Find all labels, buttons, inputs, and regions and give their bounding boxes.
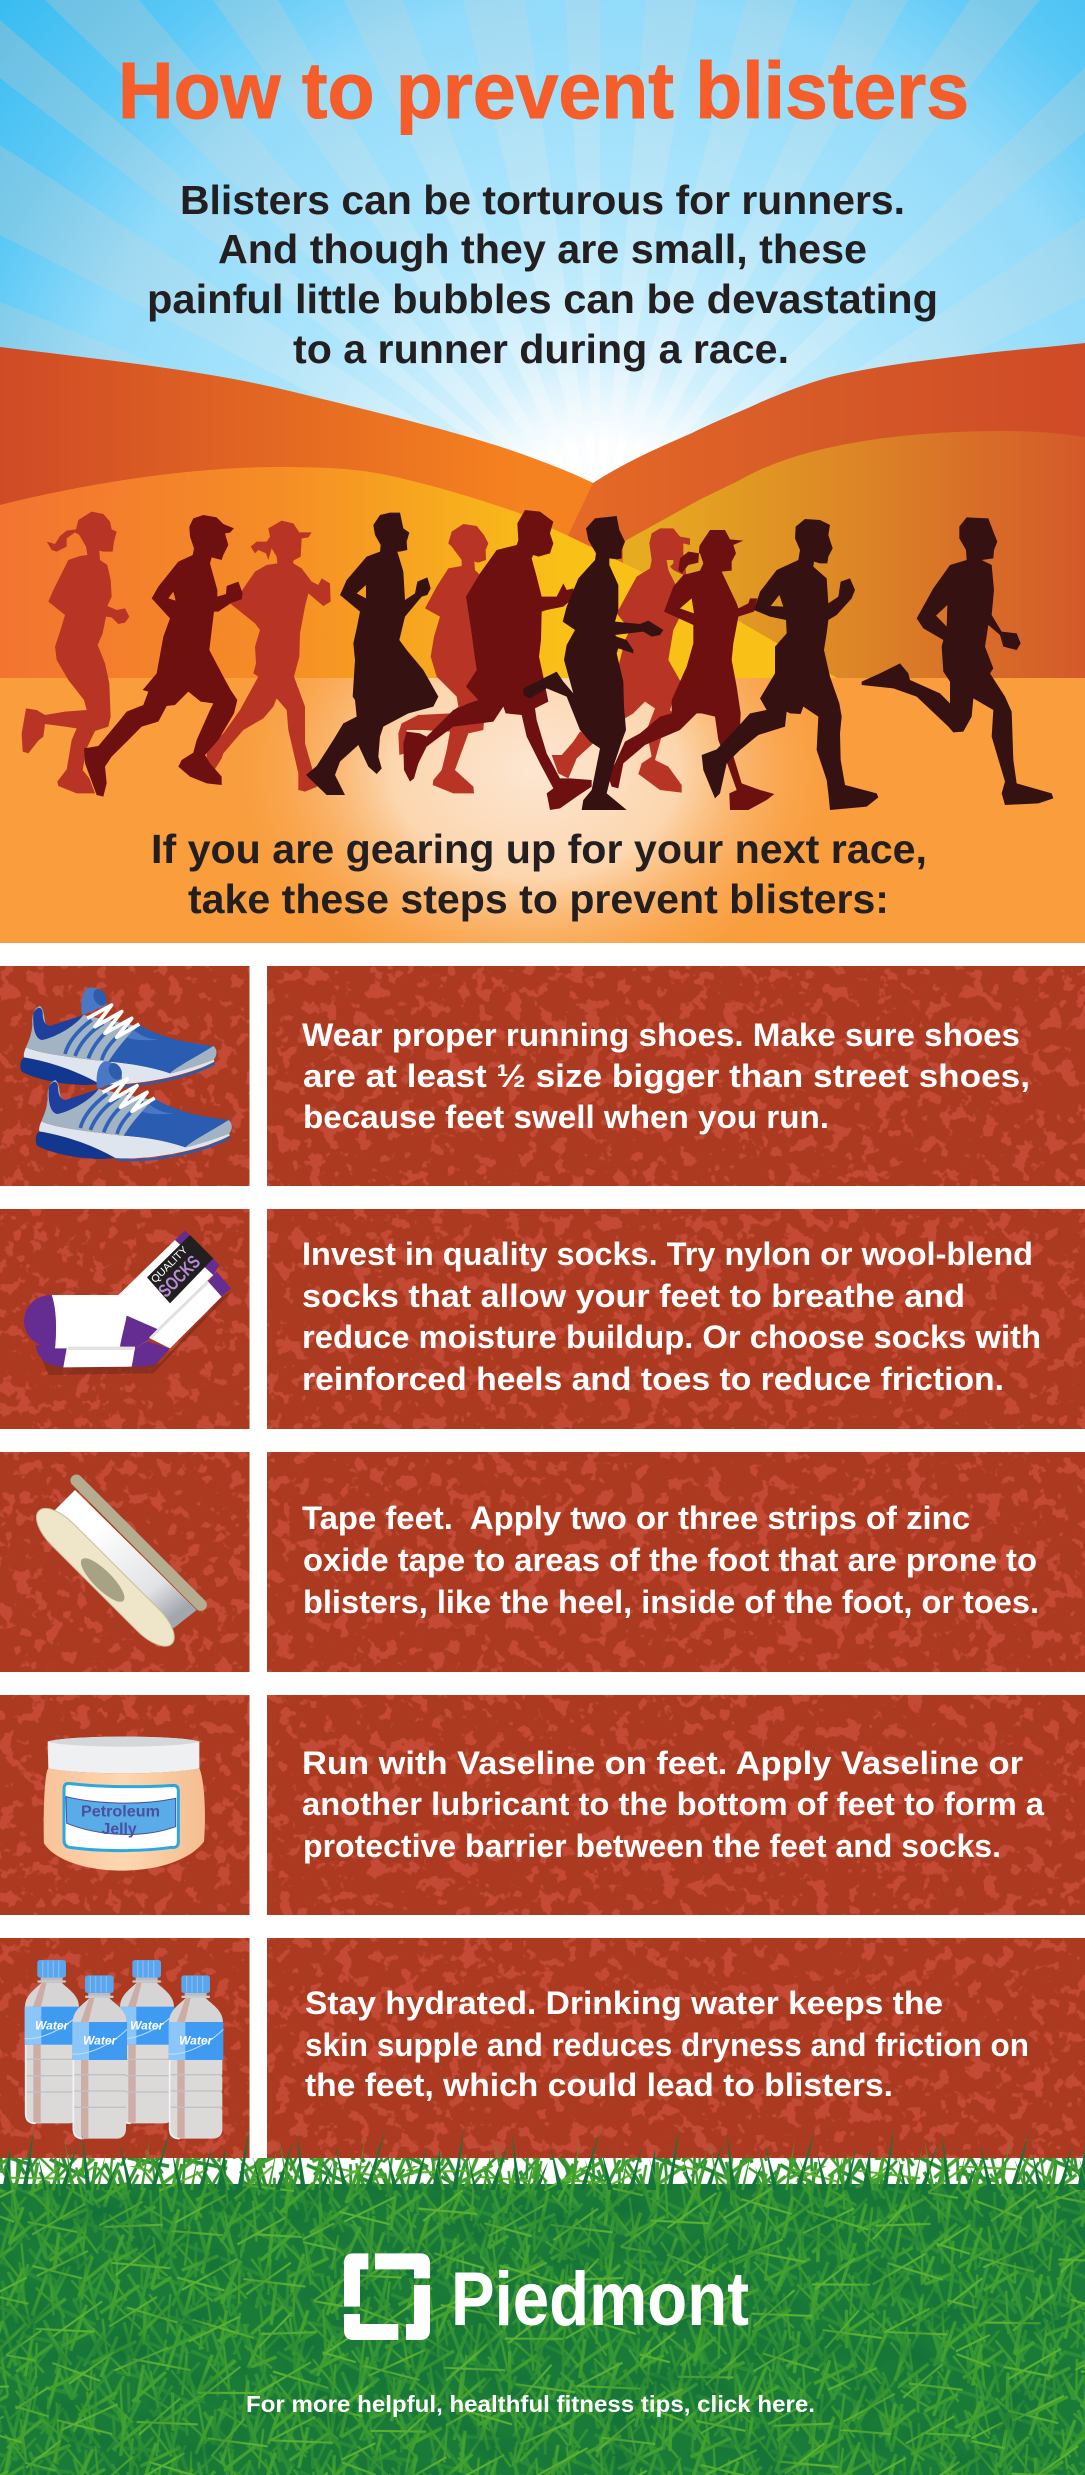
middle row runners	[84, 510, 774, 810]
panel: shoes text: because feet swell when you run.	[303, 1099, 829, 1135]
intro text	[147, 177, 938, 372]
panel: petroleum jelly text: protective barrier between the feet and socks.	[303, 1828, 1001, 1864]
icon: four water bottles	[25, 1960, 223, 2139]
title: How to prevent blisters	[118, 46, 969, 135]
intro text: painful little bubbles can be devastating	[147, 276, 938, 322]
background: sky with sun rays	[0, 0, 1085, 540]
icon: four water bottles: Water	[179, 2034, 214, 2048]
icon: jar of petroleum jelly: Petroleum	[81, 1804, 160, 1821]
logo: Piedmont: Piedmont	[451, 2257, 749, 2342]
icon: jar of petroleum jelly	[44, 1737, 205, 1871]
icon: roll of zinc oxide tape	[28, 1472, 209, 1655]
panel: petroleum jelly text: another lubricant to the bottom of feet to form a	[302, 1786, 1044, 1822]
panel: socks text: socks that allow your feet to breathe and	[302, 1278, 965, 1314]
icon: four water bottles: Water	[83, 2034, 118, 2048]
panel: shoes text: are at least ½ size bigger than street shoes,	[303, 1058, 1030, 1094]
icon: four water bottles: Water	[35, 2018, 70, 2032]
panel: tape text: Tape feet. Apply two or three strips of zinc	[302, 1500, 970, 1536]
sub heading: If you are gearing up for your next race,	[151, 826, 927, 872]
logo: Piedmont	[344, 2253, 749, 2342]
back row runners	[22, 512, 690, 793]
panel: socks text: reinforced heels and toes to reduce friction.	[302, 1361, 1004, 1397]
tile: petroleum jelly	[0, 1695, 250, 1915]
tile: socks	[0, 1209, 250, 1429]
panel: tape text	[267, 1452, 1085, 1672]
panel: shoes text	[267, 966, 1085, 1186]
panel: water text: skin supple and reduces dryness and friction on	[305, 2027, 1029, 2063]
intro text: Blisters can be torturous for runners.	[180, 177, 905, 223]
tile: tape	[0, 1452, 250, 1672]
panel: socks text	[267, 1209, 1085, 1429]
icon: four water bottles: Water	[130, 2018, 165, 2032]
icon: quality socks: QUALITY	[150, 1245, 190, 1286]
panel: water text	[267, 1938, 1085, 2158]
icon: quality socks	[24, 1231, 232, 1375]
footer call to action: For more helpful, healthful fitness tips, click here.	[246, 2391, 815, 2417]
icon: running shoes	[20, 987, 232, 1160]
panel: socks text: reduce moisture buildup. Or choose socks with	[302, 1319, 1041, 1355]
panel: water text: Stay hydrated. Drinking water keeps the	[305, 1985, 943, 2021]
runners silhouettes	[22, 510, 1053, 810]
panel: socks text: Invest in quality socks. Try nylon or wool-blend	[302, 1236, 1033, 1272]
panel: petroleum jelly text: Run with Vaseline on feet. Apply Vaseline or	[302, 1745, 1023, 1781]
panel: petroleum jelly text	[267, 1695, 1085, 1915]
tile: water	[0, 1938, 250, 2158]
sub heading: take these steps to prevent blisters:	[188, 876, 889, 922]
panel: shoes text: Wear proper running shoes. Make sure shoes	[302, 1017, 1020, 1053]
intro text: And though they are small, these	[218, 226, 867, 272]
panel: tape text: blisters, like the heel, inside of the foot, or toes.	[303, 1584, 1039, 1620]
background: hills	[0, 343, 1085, 678]
tile: shoes	[0, 966, 250, 1186]
panel: water text: the feet, which could lead to blisters.	[305, 2067, 893, 2103]
intro text: to a runner during a race.	[293, 326, 789, 372]
sub heading	[151, 826, 927, 922]
front row runners	[306, 513, 1053, 810]
grass field	[0, 2118, 1085, 2475]
icon: jar of petroleum jelly: Jelly	[102, 1821, 137, 1838]
panel: tape text: oxide tape to areas of the foot that are prone to	[303, 1542, 1037, 1578]
icon: Piedmont mark	[344, 2253, 430, 2340]
background: orange ground with glow	[0, 678, 1085, 943]
icon: quality socks: SOCKS	[154, 1251, 204, 1301]
